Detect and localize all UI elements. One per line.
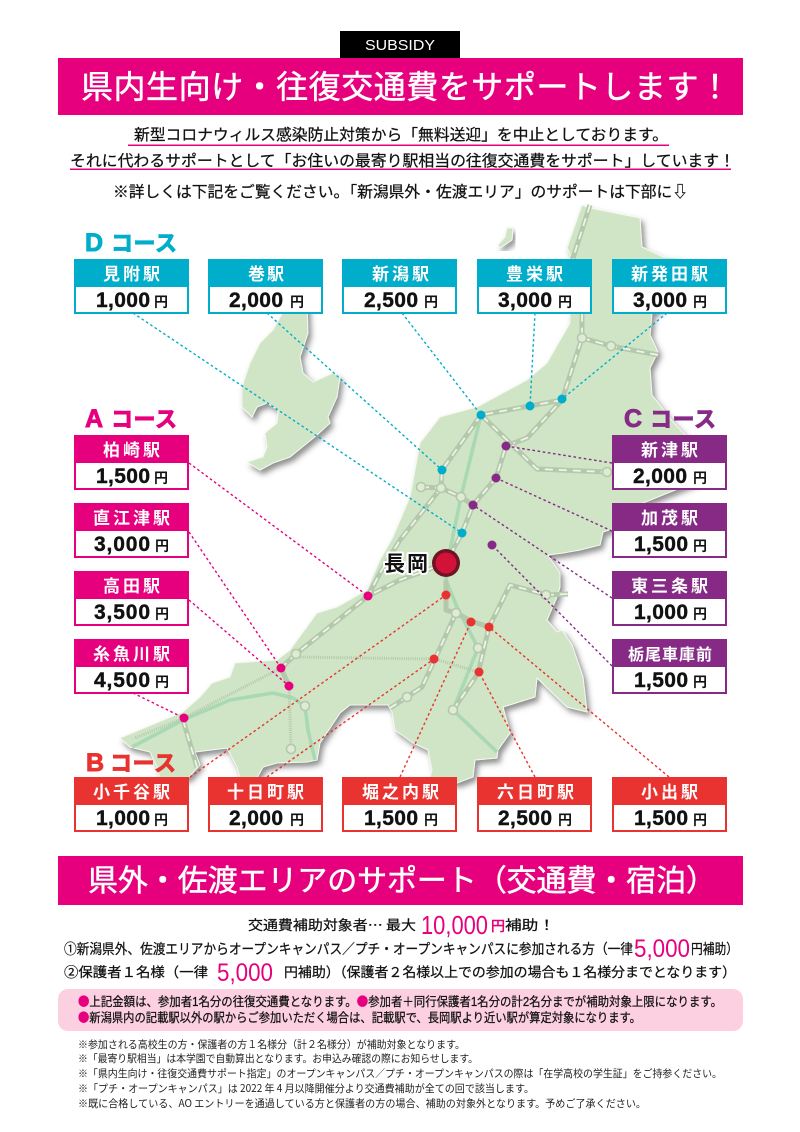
fare box: 糸魚川駅 bbox=[74, 639, 189, 693]
fare box: 巻駅 bbox=[208, 259, 323, 313]
fare box: 直江津駅: 円 bbox=[155, 538, 169, 554]
fare box: 加茂駅: 円 bbox=[693, 538, 707, 554]
fare box: 高田駅 bbox=[74, 571, 189, 625]
heading: C course bbox=[624, 405, 716, 433]
fare box: 堀之内駅 bbox=[342, 777, 457, 831]
fare box: 糸魚川駅: 4,500 bbox=[94, 669, 150, 692]
fare box: 東三条駅 bbox=[612, 571, 727, 625]
fare box: 見附駅: 見附駅 bbox=[103, 265, 160, 284]
fare box: 六日町駅: 円 bbox=[558, 812, 572, 828]
callout: pink notes: ●新潟県内の記載駅以外の駅からご参加いただく場合は、記載駅で、長岡駅より近い駅が算定対象になります。 bbox=[78, 1007, 641, 1026]
fare box: 高田駅: 高田駅 bbox=[103, 576, 160, 596]
callout: pink notes: ●上記金額は、参加者1名分の往復交通費となります。●参加者＋同行保護者1名分の計2名分までが補助対象上限になります。 bbox=[78, 991, 722, 1010]
fare box: 見附駅: 1,000 bbox=[96, 289, 150, 312]
eligibility: maximum subsidy line: 補助！ bbox=[505, 914, 555, 934]
fare box: 豊栄駅: 円 bbox=[558, 294, 572, 310]
intro text block: それに代わるサポートとして「お住いの最寄り駅相当の往復交通費をサポート」しています！ bbox=[70, 149, 735, 171]
map: minor station nodes bbox=[286, 334, 616, 754]
map: Nagaoka station marker: 長岡 bbox=[384, 553, 428, 576]
fare box: 小千谷駅: 1,000 bbox=[96, 807, 150, 830]
fare box: 新発田駅 bbox=[612, 259, 727, 313]
fare box: 新発田駅: 3,000 bbox=[633, 289, 687, 312]
fare box: 小出駅: 円 bbox=[693, 812, 707, 828]
heading: D course bbox=[85, 229, 177, 257]
fare box: 東三条駅: 1,000 bbox=[634, 601, 688, 624]
eligibility: item 2: ②保護者１名様（一律 bbox=[64, 961, 208, 981]
banner: outside prefecture and Sado support: 県外・佐渡エリアのサポート（交通費・宿泊） bbox=[88, 856, 716, 900]
footnotes: ※参加される高校生の方・保護者の方１名様分（計２名様分）が補助対象となります。 bbox=[78, 1037, 465, 1052]
fare box: 新津駅: 円 bbox=[693, 470, 707, 486]
fare box: 栃尾車庫前 bbox=[612, 639, 727, 693]
map: railway lines bbox=[135, 205, 658, 767]
heading: D course: D bbox=[85, 229, 103, 257]
intro text block: 新型コロナウィルス感染防止対策から「無料送迎」を中止としております。 bbox=[134, 123, 668, 145]
fare box: 柏崎駅 bbox=[74, 435, 189, 489]
fare box: 直江津駅 bbox=[74, 503, 189, 557]
leader lines D course bbox=[133, 313, 667, 533]
eligibility: maximum subsidy line: 10,000 bbox=[421, 910, 488, 940]
fare box: 六日町駅 bbox=[477, 777, 592, 831]
callout: pink notes bbox=[58, 989, 743, 1031]
heading: C course: コース bbox=[650, 407, 716, 432]
map: Nagaoka station marker bbox=[384, 549, 460, 577]
fare box: 栃尾車庫前: 1,500 bbox=[634, 669, 688, 692]
fare box: 小千谷駅: 円 bbox=[154, 812, 168, 828]
intro text block: ※詳しくは下記をご覧ください。「新潟県外・佐渡エリア」のサポートは下部に⇩ bbox=[113, 180, 688, 202]
fare box: 新津駅: 2,000 bbox=[633, 465, 687, 488]
heading: A course: コース bbox=[111, 407, 177, 432]
fare box: 豊栄駅 bbox=[477, 259, 592, 313]
fare box: 堀之内駅: 堀之内駅 bbox=[362, 783, 439, 802]
fare box: 直江津駅: 直江津駅 bbox=[93, 509, 170, 528]
fare box: 堀之内駅: 1,500 bbox=[364, 807, 418, 830]
leader lines A course bbox=[133, 463, 368, 718]
fare box: 東三条駅: 東三条駅 bbox=[631, 576, 708, 596]
station dots bbox=[180, 394, 566, 722]
fare box: 糸魚川駅: 円 bbox=[155, 674, 169, 690]
eligibility: item 1: ①新潟県外、佐渡エリアからオープンキャンパス／プチ・オープンキャンパスに参加される方（一律 bbox=[64, 939, 633, 959]
footnotes: ※「県内生向け・往復交通費サポート指定」のオープンキャンパス／プチ・オープンキャンパスの際は「在学高校の学生証」をご持参ください。 bbox=[78, 1066, 722, 1081]
fare box: 新潟駅: 2,500 bbox=[364, 289, 418, 312]
fare box: 東三条駅: 円 bbox=[693, 606, 707, 622]
footnotes: ※「プチ・オープンキャンパス」は 2022 年 4 月以降開催分より交通費補助が全ての回で該当します。 bbox=[78, 1081, 534, 1096]
map: Sado island bbox=[242, 305, 340, 470]
leader lines B course bbox=[190, 595, 669, 777]
heading: B course: B bbox=[86, 749, 104, 777]
fare box: 六日町駅: 六日町駅 bbox=[497, 783, 574, 802]
fare box: 新潟駅 bbox=[342, 259, 457, 313]
fare box: 新津駅: 新津駅 bbox=[641, 441, 698, 460]
heading: C course: C bbox=[624, 405, 642, 433]
fare box: 豊栄駅: 3,000 bbox=[498, 289, 552, 312]
fare box: 十日町駅: 十日町駅 bbox=[227, 783, 304, 802]
footnotes bbox=[78, 1037, 722, 1111]
fare box: 新発田駅: 円 bbox=[693, 294, 707, 310]
fare box: 新津駅 bbox=[612, 435, 727, 489]
map of Niigata prefecture bbox=[120, 205, 700, 783]
heading: B course bbox=[86, 749, 176, 777]
fare box: 柏崎駅: 柏崎駅 bbox=[103, 441, 160, 460]
heading: A course bbox=[85, 405, 177, 433]
eligibility: maximum subsidy line: 円 bbox=[491, 918, 505, 934]
fare box: 十日町駅 bbox=[208, 777, 323, 831]
fare box: 柏崎駅: 1,500 bbox=[96, 465, 150, 488]
fare box: 十日町駅: 円 bbox=[290, 812, 304, 828]
section tag: SUBSIDY bbox=[340, 31, 460, 58]
fare box: 小千谷駅: 小千谷駅 bbox=[93, 783, 170, 802]
eligibility: item 1 bbox=[64, 935, 738, 963]
fare box: 豊栄駅: 豊栄駅 bbox=[506, 264, 563, 284]
eligibility: item 2: 円補助）（保護者２名様以上での参加の場合も１名様分までとなります） bbox=[284, 961, 736, 981]
fare box: 小出駅 bbox=[612, 777, 727, 831]
fare box: 糸魚川駅: 糸魚川駅 bbox=[93, 644, 170, 664]
footnotes: ※「最寄り駅相当」は本学園で自動算出となります。お申込み確認の際にお知らせします。 bbox=[78, 1051, 478, 1066]
eligibility: item 2 bbox=[64, 959, 736, 987]
fare box: 栃尾車庫前: 円 bbox=[693, 674, 707, 690]
title banner: 県内生向け・往復交通費をサポートします！ bbox=[81, 62, 731, 108]
fare box: 新潟駅: 円 bbox=[424, 294, 438, 310]
fare box: 六日町駅: 2,500 bbox=[498, 807, 552, 830]
fare box: 堀之内駅: 円 bbox=[424, 812, 438, 828]
leader lines C course bbox=[473, 446, 612, 666]
eligibility: item 1: 円補助） bbox=[691, 939, 738, 959]
fare box: 小千谷駅 bbox=[74, 777, 189, 831]
heading: A course: A bbox=[85, 405, 103, 433]
eligibility: maximum subsidy line: 交通費補助対象者… 最大 bbox=[248, 914, 416, 934]
fare box: 加茂駅 bbox=[612, 503, 727, 557]
eligibility: item 2: 5,000 bbox=[217, 959, 273, 987]
fare box: 巻駅: 円 bbox=[290, 294, 304, 310]
fare box: 柏崎駅: 円 bbox=[154, 470, 168, 486]
fare box: 高田駅: 円 bbox=[155, 606, 169, 622]
fare box: 新発田駅: 新発田駅 bbox=[631, 265, 708, 284]
intro text block bbox=[70, 123, 735, 202]
map: green shinkansen lines bbox=[132, 415, 497, 760]
heading: D course: コース bbox=[111, 231, 177, 256]
fare box: 見附駅 bbox=[74, 259, 189, 313]
eligibility: maximum subsidy line bbox=[248, 910, 555, 940]
fare box: 巻駅: 巻駅 bbox=[248, 265, 284, 284]
fare box: 小出駅: 小出駅 bbox=[641, 783, 698, 802]
fare box: 新潟駅: 新潟駅 bbox=[372, 265, 429, 284]
fare box: 栃尾車庫前: 栃尾車庫前 bbox=[628, 645, 712, 664]
fare box: 小出駅: 1,500 bbox=[634, 807, 688, 830]
map: mainland bbox=[120, 205, 700, 783]
fare box: 直江津駅: 3,000 bbox=[94, 533, 150, 556]
fare box: 加茂駅: 1,500 bbox=[634, 533, 688, 556]
eligibility text block bbox=[64, 910, 738, 987]
fare box: 加茂駅: 加茂駅 bbox=[641, 508, 698, 528]
section tag: SUBSIDY: SUBSIDY bbox=[365, 37, 435, 54]
fare box: 巻駅: 2,000 bbox=[229, 289, 283, 312]
fare box: 高田駅: 3,500 bbox=[94, 601, 150, 624]
map: Awashima island bbox=[498, 228, 513, 248]
heading: B course: コース bbox=[110, 751, 176, 776]
footnotes: ※既に合格している、AO エントリーを通過している方と保護者の方の場合、補助の対象外となります。予めご了承ください。 bbox=[78, 1096, 646, 1111]
fare box: 十日町駅: 2,000 bbox=[229, 807, 283, 830]
fare box: 見附駅: 円 bbox=[154, 294, 168, 310]
eligibility: item 1: 5,000 bbox=[634, 935, 690, 963]
